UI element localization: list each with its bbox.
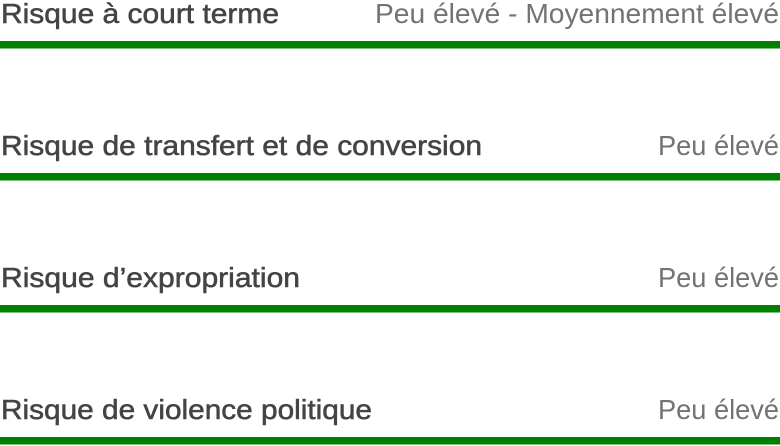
label: transfer and conversion risk: Risque de transfert et de conversion (1, 130, 482, 161)
value: political violence risk: Peu élevé (658, 394, 779, 425)
green bar: transfer and conversion risk (0, 173, 780, 180)
value: expropriation risk: Peu élevé (658, 262, 779, 293)
row: transfer and conversion risk (0, 130, 780, 180)
value: transfer and conversion risk: Peu élevé (658, 130, 779, 161)
green bar: expropriation risk (0, 305, 780, 312)
green bar: short-term risk (0, 41, 780, 48)
label: political violence risk: Risque de violence politique (1, 394, 372, 425)
row: expropriation risk (0, 262, 780, 312)
row: short-term risk (0, 0, 780, 48)
row: political violence risk (0, 394, 780, 444)
green bar: political violence risk (0, 437, 780, 444)
label: expropriation risk: Risque d’expropriation (1, 262, 300, 293)
